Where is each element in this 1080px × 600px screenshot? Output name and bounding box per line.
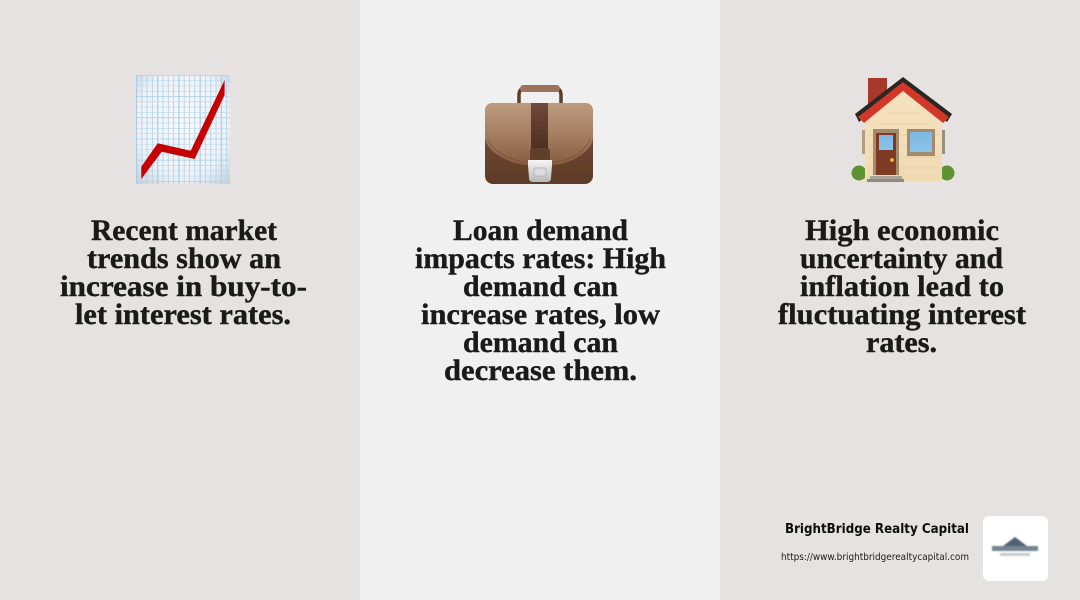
heading: economic uncertainty text: fluctuating interest [778, 299, 1026, 331]
logo card [983, 516, 1048, 581]
heading: economic uncertainty text: rates. [866, 327, 937, 359]
heading: market trends text [60, 215, 307, 331]
heading: economic uncertainty text: uncertainty and [800, 243, 1004, 275]
panel: loan demand [360, 0, 720, 600]
heading: loan demand text: Loan demand [453, 215, 629, 247]
heading: loan demand text: decrease them. [444, 355, 637, 387]
icon: house [852, 77, 954, 182]
heading: market trends text: Recent market [91, 215, 277, 247]
heading: market trends text: let interest rates. [75, 299, 291, 331]
heading: economic uncertainty text [778, 215, 1026, 359]
heading: loan demand text: increase rates, low [421, 299, 661, 331]
heading: loan demand text: demand can [463, 271, 618, 303]
heading: loan demand text: demand can [463, 327, 618, 359]
heading: economic uncertainty text: High economic [805, 215, 999, 247]
website url: https://www.brightbridgerealtycapital.com [781, 552, 969, 563]
panel: economic uncertainty [720, 0, 1080, 600]
heading: loan demand text: impacts rates: High [415, 243, 666, 275]
heading: loan demand text [415, 215, 666, 387]
heading: market trends text: increase in buy-to- [60, 271, 307, 303]
heading: economic uncertainty text: inflation lead to [800, 271, 1004, 303]
heading: market trends text: trends show an [87, 243, 281, 275]
icon: briefcase [485, 85, 593, 184]
panel: market trends [0, 0, 360, 600]
brand name: BrightBridge Realty Capital [785, 521, 969, 537]
icon: chart with rising red line [136, 75, 230, 184]
